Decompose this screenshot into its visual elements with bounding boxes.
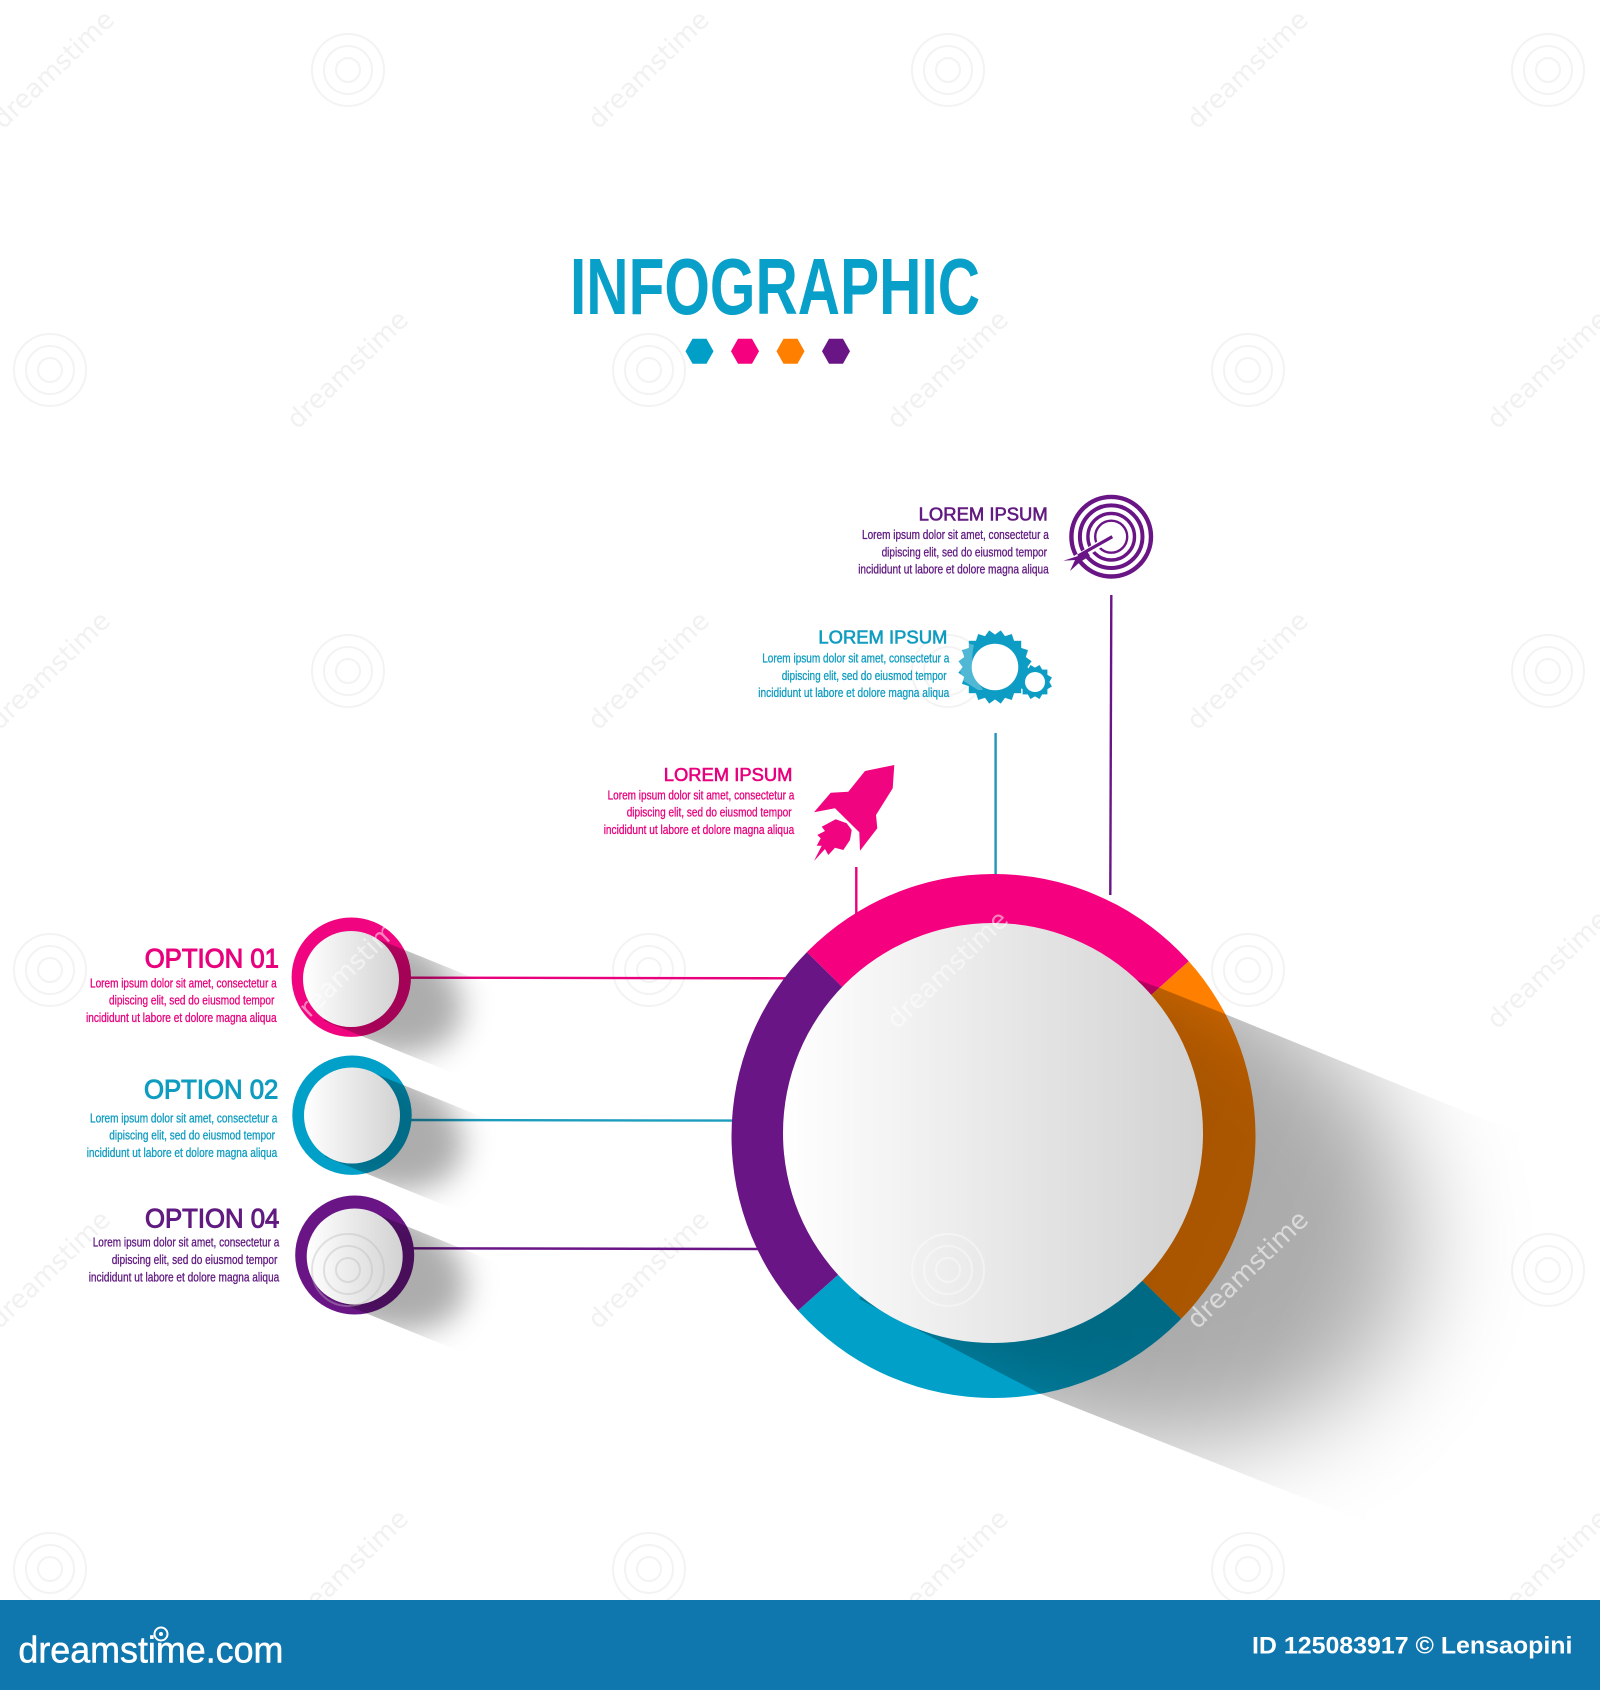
connector: teal vertical: [994, 733, 997, 876]
watermark: diagonal wordmarks: dreamstime: [881, 305, 1015, 435]
watermark: diagonal wordmarks: dreamstime: [281, 305, 415, 435]
callout: purple text block: LOREM IPSUM: [919, 505, 1048, 525]
option 02: dipiscing elit, sed do eiusmod tempor: [109, 1128, 276, 1143]
option 04: OPTION 04: [145, 1203, 279, 1233]
callout: teal text block: Lorem ipsum dolor sit amet, consectetur a: [762, 651, 950, 666]
footer bar: [0, 1600, 1600, 1690]
option 04: Lorem ipsum dolor sit amet, consectetur a: [93, 1235, 280, 1250]
option 02: [87, 1074, 278, 1160]
option 01: dipiscing elit, sed do eiusmod tempor: [109, 993, 275, 1008]
option 01: incididunt ut labore et dolore magna aliqua: [86, 1010, 277, 1025]
option 02: Lorem ipsum dolor sit amet, consectetur a: [90, 1110, 278, 1125]
callout: pink text block: [604, 765, 795, 837]
connector: option 01 line: [405, 977, 790, 979]
option 04: [89, 1203, 280, 1284]
watermark: diagonal wordmarks: dreamstime: [281, 1504, 415, 1634]
callout: pink text block: dipiscing elit, sed do eiusmod tempor: [627, 805, 792, 820]
icon: rocket: [814, 765, 894, 861]
watermark: diagonal wordmarks: dreamstime: [1181, 606, 1315, 736]
callout: teal text block: [758, 627, 950, 700]
watermark: diagonal wordmarks: dreamstime: [582, 5, 716, 135]
footer credit: ID 125083917 © Lensaopini: [1252, 1632, 1572, 1659]
option 04 circle: [295, 1196, 482, 1342]
option 02: OPTION 02: [144, 1074, 278, 1104]
long shadow: [859, 980, 1476, 1488]
callout: purple text block: dipiscing elit, sed do eiusmod tempor: [882, 544, 1048, 559]
watermark: marks over artwork: dreamstime: [281, 905, 415, 1035]
option 01: Lorem ipsum dolor sit amet, consectetur a: [90, 975, 277, 990]
watermark: diagonal wordmarks: dreamstime: [1181, 5, 1315, 135]
callout: teal text block: dipiscing elit, sed do eiusmod tempor: [782, 668, 947, 683]
watermark: marks over artwork: dreamstime: [881, 905, 1015, 1035]
centre disc: [783, 923, 1203, 1343]
watermark: diagonal wordmarks: dreamstime: [582, 606, 716, 736]
connector: option 02 line: [405, 1119, 735, 1122]
option 02: incididunt ut labore et dolore magna aliqua: [87, 1145, 278, 1160]
option 01: [86, 943, 279, 1025]
connector: option 04 line: [405, 1247, 760, 1250]
option 04: incididunt ut labore et dolore magna aliqua: [89, 1269, 280, 1284]
callout: pink text block: LOREM IPSUM: [664, 765, 792, 785]
callout: purple text block: [858, 505, 1049, 576]
callout: pink text block: Lorem ipsum dolor sit amet, consectetur a: [608, 787, 795, 802]
title: INFOGRAPHIC: [570, 242, 980, 331]
hexagon row: [686, 339, 850, 364]
callout: purple text block: Lorem ipsum dolor sit amet, consectetur a: [862, 527, 1049, 542]
connector: pink vertical: [855, 867, 857, 915]
callout: pink text block: incididunt ut labore et dolore magna aliqua: [604, 822, 795, 837]
footer logo: dreamstime.com: [18, 1630, 283, 1671]
watermark: marks over artwork: [281, 905, 1315, 1335]
option 01 circle: [292, 918, 478, 1066]
watermark: diagonal wordmarks: dreamstime: [582, 1205, 716, 1335]
connector: purple vertical: [1110, 595, 1111, 895]
panel: central ring diagram: [732, 874, 1476, 1488]
icon: target with arrow: [1063, 497, 1151, 576]
callout: teal text block: incididunt ut labore et dolore magna aliqua: [758, 685, 950, 700]
ring segments: [732, 874, 1256, 1398]
callout: teal text block: LOREM IPSUM: [818, 627, 947, 647]
watermark: diagonal wordmarks: dreamstime: [881, 1504, 1015, 1634]
option 04: dipiscing elit, sed do eiusmod tempor: [112, 1252, 278, 1267]
option 01: OPTION 01: [145, 943, 279, 973]
option 02 circle: [292, 1056, 480, 1202]
icon: gears: [958, 630, 1052, 704]
watermark: marks over artwork: dreamstime: [1181, 1205, 1315, 1335]
callout: purple text block: incididunt ut labore et dolore magna aliqua: [858, 561, 1049, 576]
